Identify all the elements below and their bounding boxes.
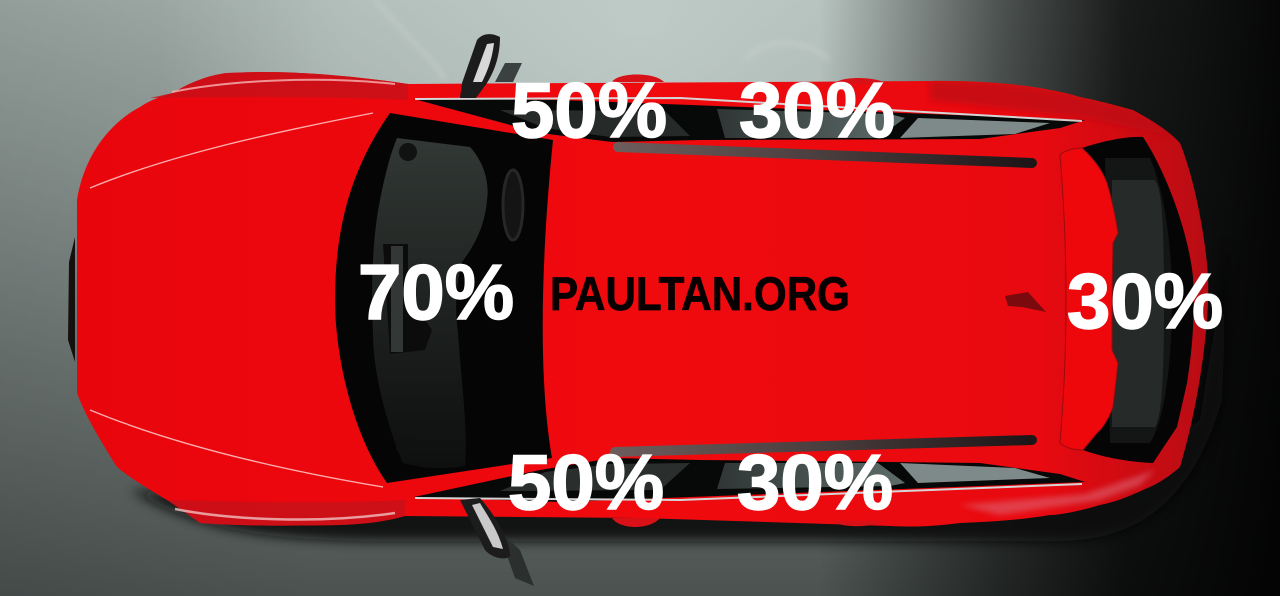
top mirror — [460, 34, 500, 98]
rear window surround — [1070, 137, 1194, 463]
tint label: front bottom window 50%: 50% — [508, 438, 664, 526]
rear quarter shading — [930, 81, 1170, 515]
windscreen — [335, 113, 553, 483]
top side windows — [414, 99, 1085, 142]
roof rails — [618, 147, 1032, 163]
rear glass — [1112, 180, 1164, 427]
interior: air vent — [383, 244, 432, 354]
bottom mirror — [460, 498, 510, 558]
car body — [77, 72, 1208, 527]
interior: dashboard — [372, 138, 488, 468]
tint label: windscreen 70%: 70% — [358, 248, 514, 336]
tint label: rear top window 30%: 30% — [739, 66, 895, 154]
front grille edge — [68, 237, 75, 362]
tint label: rear window 30%: 30% — [1067, 257, 1223, 345]
bottom mirror shadow — [498, 530, 534, 586]
interior: dash speakers — [399, 143, 417, 161]
interior: steering wheel — [503, 170, 523, 240]
watermark: PAULTAN.ORG — [550, 267, 850, 320]
fender strips — [150, 72, 408, 100]
hood creases — [90, 113, 373, 188]
tint label: front top window 50%: 50% — [511, 66, 667, 154]
door handles — [612, 74, 664, 82]
bottom side windows — [414, 458, 1085, 502]
car shadow — [130, 240, 1228, 541]
tailgate — [1060, 148, 1118, 450]
top mirror shadow — [495, 63, 522, 82]
tint label: rear bottom window 30%: 30% — [737, 438, 893, 526]
rear antenna — [1005, 292, 1046, 312]
